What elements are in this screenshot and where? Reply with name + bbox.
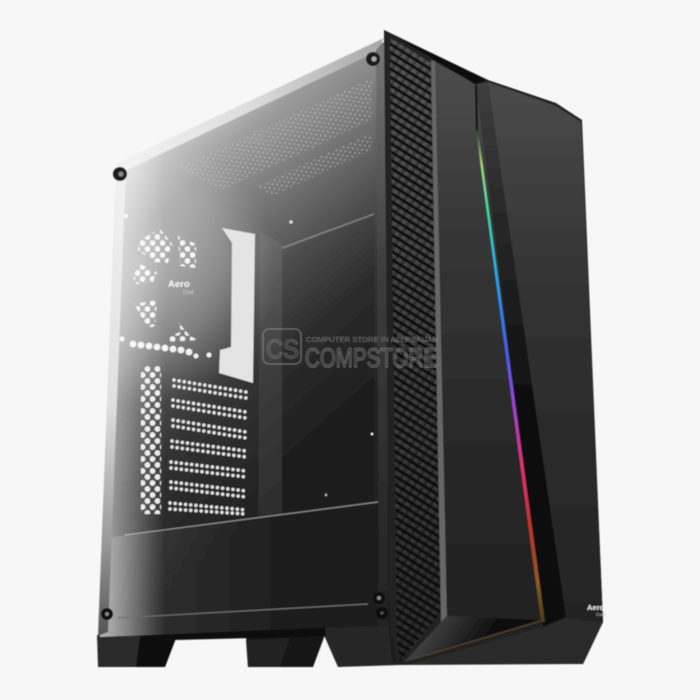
glass base — [100, 42, 388, 637]
PSU shroud — [100, 502, 378, 637]
watermark name: COMPSTORE — [305, 343, 437, 373]
side glass panel — [90, 20, 395, 640]
fan logo: Aero — [168, 279, 190, 290]
top mesh — [178, 78, 372, 190]
brand logo: Aero Cool: Cool — [596, 612, 605, 617]
top black wedge — [396, 37, 487, 85]
white bracket — [219, 228, 255, 383]
bottom face — [410, 618, 603, 664]
screws — [101, 52, 388, 620]
rear fan: Cool — [183, 290, 193, 296]
case feet and base — [97, 612, 400, 667]
rear fan — [133, 229, 198, 342]
RGB light strip — [410, 85, 545, 660]
exhaust vent dots — [120, 336, 212, 358]
front panel dark wedge — [476, 82, 566, 627]
front panel base — [384, 30, 603, 665]
front panel left — [435, 62, 543, 620]
front pillar — [384, 30, 400, 664]
vertical hex vent — [141, 366, 161, 514]
front panel right — [488, 82, 603, 622]
watermark tagline: COMPUTER STORE IN AZERBAIJAN — [306, 335, 438, 344]
brand logo: Aero Cool — [587, 603, 605, 617]
bottom facet — [404, 616, 538, 662]
carbon fibre strip — [390, 38, 441, 662]
watermark — [263, 329, 438, 373]
light strip edge — [431, 60, 447, 622]
brand logo: Aero Cool: Aero — [587, 603, 605, 612]
watermark icon: CS — [266, 334, 299, 364]
PCI slots — [170, 380, 246, 514]
glass light fade — [112, 42, 384, 636]
illustration: PC tower case product photo — [96, 29, 606, 668]
chassis interior — [124, 214, 374, 526]
glass rim left — [98, 165, 126, 636]
glass rim top — [117, 38, 384, 170]
glass rim right — [376, 40, 392, 626]
top mesh rear — [258, 132, 372, 196]
